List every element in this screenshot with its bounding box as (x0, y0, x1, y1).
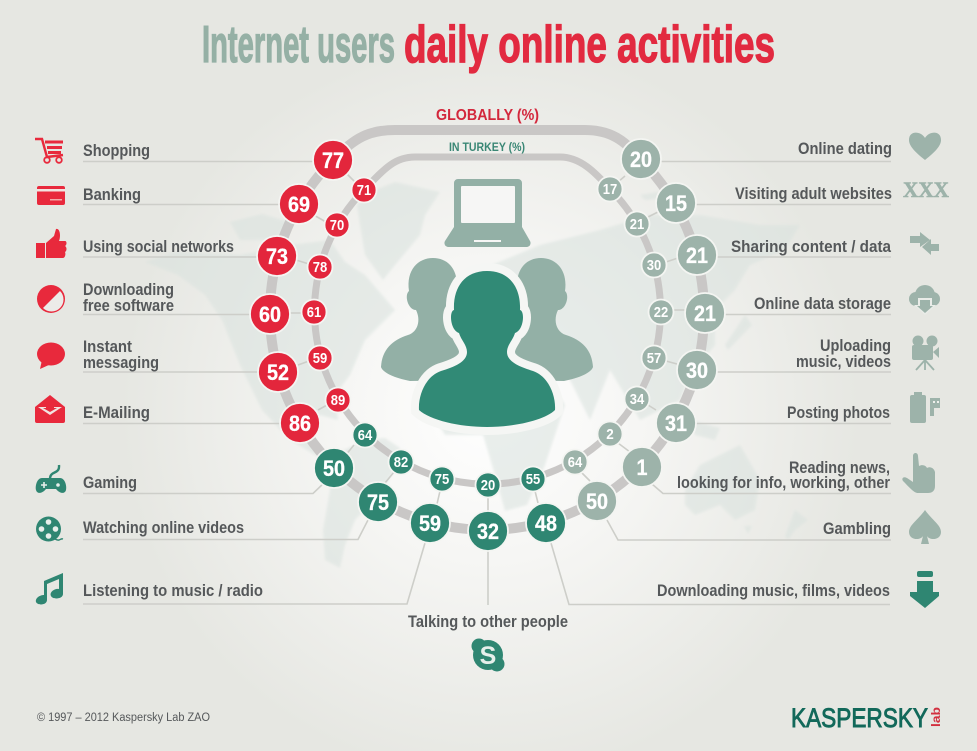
heading: in Turkey: IN TURKEY (%) (449, 140, 525, 154)
Turkey numbers: 78 (313, 260, 327, 276)
Turkey numbers: 70 (330, 218, 344, 234)
global numbers: 20 (630, 147, 652, 172)
icon: movie camera (912, 336, 939, 370)
Turkey numbers: 89 (331, 393, 345, 409)
left labels: Downloading (83, 280, 174, 299)
title: daily online activities (404, 16, 775, 74)
Turkey numbers: 71 (357, 183, 371, 199)
icon: skype: S (480, 642, 496, 670)
icon: laptop (444, 179, 531, 247)
right labels: Posting photos (787, 403, 890, 422)
left labels: Instant (83, 337, 132, 356)
Turkey numbers: 17 (603, 182, 617, 198)
icon: XXX: XXX (903, 177, 949, 202)
leader lines (83, 162, 891, 605)
global numbers: 21 (686, 243, 708, 268)
left labels: Listening to music / radio (83, 581, 263, 600)
left labels: Watching online videos (83, 518, 244, 537)
icon: pointing hand (902, 453, 935, 493)
global numbers: 60 (259, 302, 281, 327)
icon: half circle (37, 285, 65, 313)
right labels: music, videos (796, 352, 891, 371)
global numbers: 31 (665, 411, 687, 436)
world map (145, 182, 808, 568)
icon: spade (909, 510, 941, 544)
left labels: Shopping (83, 141, 150, 160)
global numbers: 15 (665, 191, 687, 216)
Turkey numbers: 59 (313, 351, 327, 367)
Turkey values (302, 176, 674, 498)
label: talking: Talking to other people (408, 612, 568, 631)
icon: card (37, 186, 65, 205)
global values (250, 139, 725, 551)
Turkey numbers: 64 (568, 455, 582, 471)
left labels: E-Mailing (83, 403, 150, 422)
left labels: messaging (83, 353, 159, 372)
global numbers: 50 (323, 456, 345, 481)
icon: envelope (35, 395, 65, 423)
left labels: Banking (83, 185, 141, 204)
icon: cart (35, 139, 63, 163)
heading: globally: GLOBALLY (%) (436, 107, 539, 124)
global numbers: 59 (419, 511, 441, 536)
icon: skype (472, 638, 504, 672)
Turkey numbers: 64 (358, 428, 372, 444)
logo: Kaspersky Lab: lab (929, 707, 943, 727)
global numbers: 52 (267, 360, 289, 385)
Turkey numbers: 30 (647, 258, 661, 274)
right labels: Online data storage (754, 294, 891, 313)
left labels: Gaming (83, 473, 137, 492)
global numbers: 32 (477, 519, 499, 544)
Turkey numbers: 21 (630, 217, 644, 233)
icon: film reel (36, 516, 63, 542)
Turkey numbers: 75 (435, 472, 449, 488)
right labels: Online dating (798, 139, 892, 158)
Turkey numbers: 57 (647, 351, 661, 367)
title (202, 16, 775, 74)
logo: Kaspersky Lab: KASPERSKY (791, 703, 928, 733)
icon: exchange arrows (910, 232, 939, 255)
left labels (83, 141, 263, 600)
Turkey numbers: 34 (630, 392, 644, 408)
icon: download arrow (910, 571, 939, 608)
icon: thumb up (36, 229, 66, 258)
right labels: Reading news, (789, 458, 890, 477)
right labels (657, 139, 892, 600)
global numbers (259, 147, 716, 544)
global numbers: 21 (694, 301, 716, 326)
Turkey numbers: 61 (307, 305, 321, 321)
icon: gamepad (36, 465, 66, 493)
right labels: Gambling (823, 519, 891, 538)
Turkey numbers: 2 (606, 427, 614, 443)
Turkey numbers: 22 (654, 305, 668, 321)
global numbers: 86 (289, 411, 311, 436)
icon: cloud (909, 285, 940, 315)
global numbers: 1 (636, 455, 648, 480)
track: global arc (270, 130, 704, 530)
right labels: Sharing content / data (731, 237, 891, 256)
icon: photo film (910, 392, 940, 423)
right labels: Downloading music, films, videos (657, 581, 890, 600)
global numbers: 69 (288, 192, 310, 217)
left labels: free software (83, 296, 174, 315)
global numbers: 73 (266, 244, 288, 269)
icon: heart (909, 133, 941, 160)
icon: people (381, 258, 593, 427)
icon: music note (36, 573, 63, 604)
global numbers: 48 (535, 511, 557, 536)
track: Turkey arc (314, 157, 660, 484)
Turkey numbers: 82 (394, 455, 408, 471)
global numbers: 75 (367, 490, 389, 515)
left labels: Using social networks (83, 237, 234, 256)
global numbers: 77 (322, 148, 344, 173)
Turkey numbers (307, 182, 668, 494)
icon: speech bubble (37, 342, 65, 369)
copyright: © 1997 – 2012 Kaspersky Lab ZAO (37, 712, 210, 724)
Turkey numbers: 20 (481, 478, 495, 494)
right labels: Uploading (820, 336, 891, 355)
right labels: looking for info, working, other (677, 473, 890, 492)
title: Internet users (202, 16, 395, 74)
Turkey numbers: 55 (526, 472, 540, 488)
global numbers: 30 (686, 358, 708, 383)
global numbers: 50 (586, 489, 608, 514)
right labels: Visiting adult websites (735, 184, 892, 203)
